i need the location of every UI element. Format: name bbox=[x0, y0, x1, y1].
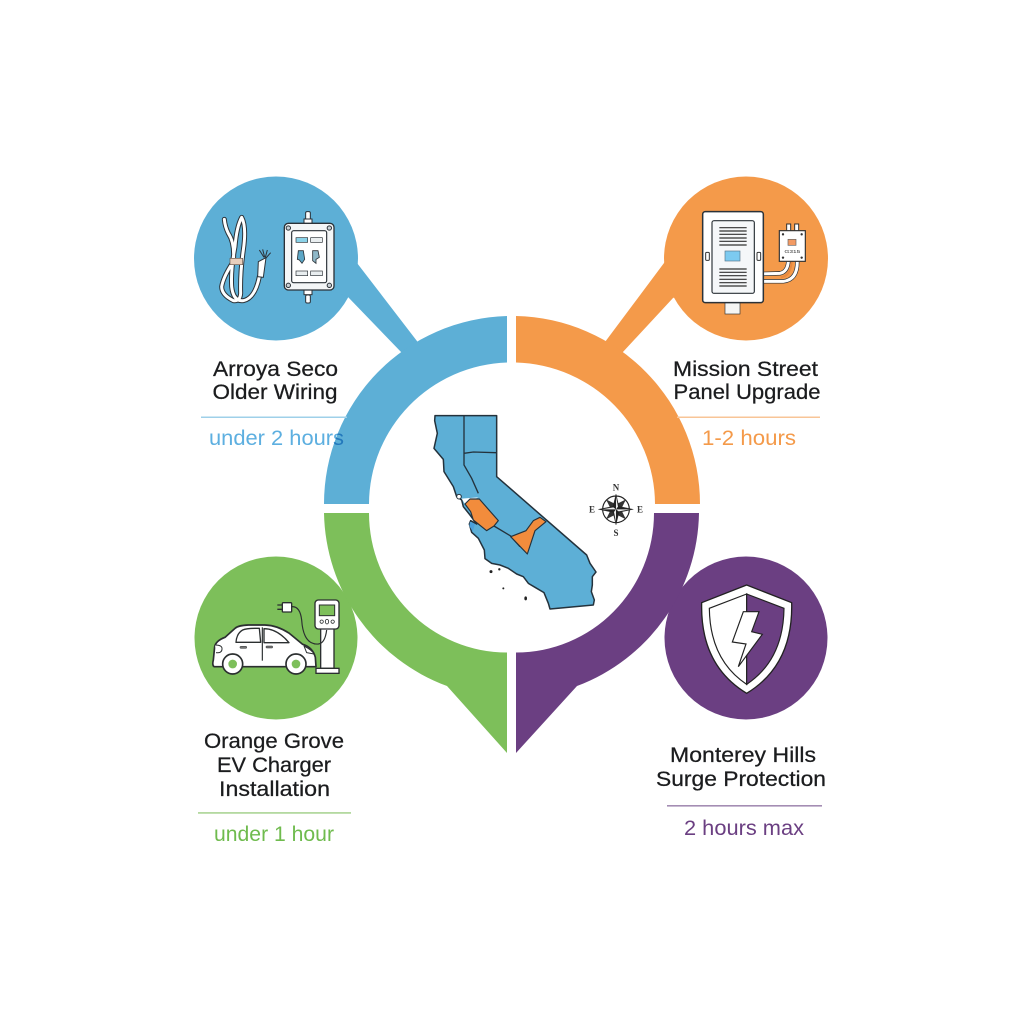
panel: green callout with pointer bbox=[194, 513, 507, 753]
text: Mission Street label: Mission Street bbox=[673, 358, 818, 381]
text: Arroya Seco label bbox=[201, 358, 347, 450]
icon: compass rose bbox=[589, 483, 643, 538]
text: Arroya Seco label: Older Wiring bbox=[212, 381, 338, 404]
panel: purple callout with pointer bbox=[516, 513, 828, 753]
icon: compass rose: N bbox=[613, 483, 620, 493]
icon: shield with lightning bolt bbox=[702, 585, 792, 693]
text: Orange Grove label: EV Charger bbox=[217, 754, 331, 777]
text: Monterey Hills label bbox=[656, 744, 826, 840]
text: Orange Grove label: Installation bbox=[219, 778, 330, 801]
text: Monterey Hills label: Surge Protection bbox=[656, 768, 826, 791]
icon: compass rose: E bbox=[589, 504, 595, 514]
icon: electrical panel with breaker bbox=[703, 212, 805, 314]
text: Arroya Seco label: Arroya Seco bbox=[213, 358, 338, 381]
text: Monterey Hills label: 2 hours max bbox=[684, 817, 805, 840]
map islands bbox=[489, 568, 527, 600]
panel: blue callout with connector bbox=[194, 176, 507, 504]
text: Arroya Seco label: under 2 hours bbox=[209, 427, 344, 450]
text: Orange Grove label: Orange Grove bbox=[204, 730, 344, 753]
map region: bay area highlight bbox=[465, 499, 498, 531]
map region: inland highlight bbox=[511, 517, 546, 554]
icon: compass rose: S bbox=[613, 528, 618, 538]
panel: orange callout with connector bbox=[516, 176, 828, 504]
icon: charging station bbox=[277, 600, 339, 673]
icon: breaker box: G315 bbox=[784, 249, 801, 255]
text: Mission Street label: Panel Upgrade bbox=[674, 381, 820, 404]
text: Orange Grove label: under 1 hour bbox=[214, 823, 334, 846]
text: Orange Grove label bbox=[198, 730, 351, 846]
icon: electric car at charger bbox=[213, 600, 339, 674]
text: Monterey Hills label: Monterey Hills bbox=[670, 744, 816, 767]
icon: conduit wires bbox=[760, 262, 797, 281]
icon: car bbox=[213, 625, 316, 674]
text: Mission Street label bbox=[673, 358, 820, 450]
icon: wiring and outlet box bbox=[222, 212, 334, 303]
icon: compass rose: E bbox=[637, 504, 643, 514]
text: Mission Street label: 1-2 hours bbox=[702, 427, 796, 450]
icon: coiled cable bbox=[222, 217, 259, 301]
icon: outlet box bbox=[284, 212, 334, 303]
map: California with highlighted regions bbox=[434, 416, 596, 609]
